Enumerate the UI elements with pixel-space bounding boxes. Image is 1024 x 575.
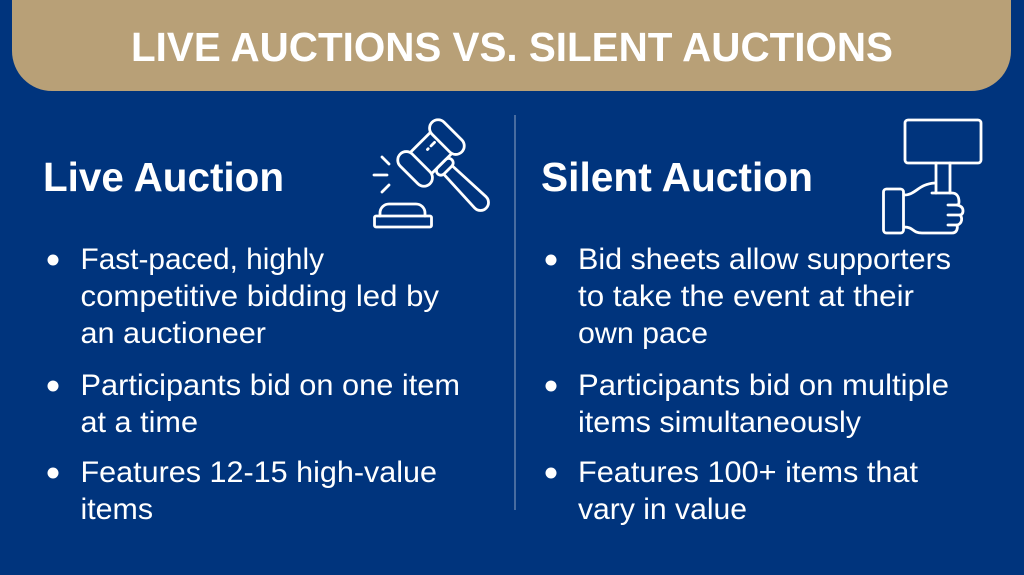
icon: hand holding paddle (884, 120, 981, 233)
bullet 3: vary in value (578, 493, 747, 526)
bullet 3: Features 12-15 high-value (80, 456, 437, 489)
bullet 1 (48, 243, 439, 350)
bullet 2: at a time (80, 406, 198, 439)
title: LIVE AUCTIONS VS. SILENT AUCTIONS (131, 24, 893, 70)
bullet 1: Bid sheets allow supporters (578, 243, 951, 276)
panel: silent auction (541, 120, 981, 526)
title banner (12, 0, 1011, 91)
bullet list: silent auction (546, 243, 951, 526)
icon: gavel (374, 116, 508, 230)
heading: silent auction: Silent Auction (541, 154, 813, 200)
bullet 1: Fast-paced, highly (80, 243, 324, 276)
bullet 2: Participants bid on one item (80, 369, 460, 402)
bullet 1: own pace (578, 317, 708, 350)
bullet 1: to take the event at their (578, 280, 914, 313)
bullet 2 (546, 369, 949, 439)
bullet 3: Features 100+ items that (578, 456, 918, 489)
bullet 2: Participants bid on multiple (578, 369, 949, 402)
panel: live auction (43, 116, 508, 526)
bullet 3: items (80, 493, 153, 526)
bullet 1: an auctioneer (80, 317, 266, 350)
heading: live auction: Live Auction (43, 154, 284, 200)
bullet 3 (48, 456, 437, 526)
bullet 1: competitive bidding led by (80, 280, 439, 313)
bullet 1 (546, 243, 951, 350)
bullet 3 (546, 456, 918, 526)
bullet 2 (48, 369, 460, 439)
bullet list: live auction (48, 243, 460, 526)
bullet 2: items simultaneously (578, 406, 861, 439)
